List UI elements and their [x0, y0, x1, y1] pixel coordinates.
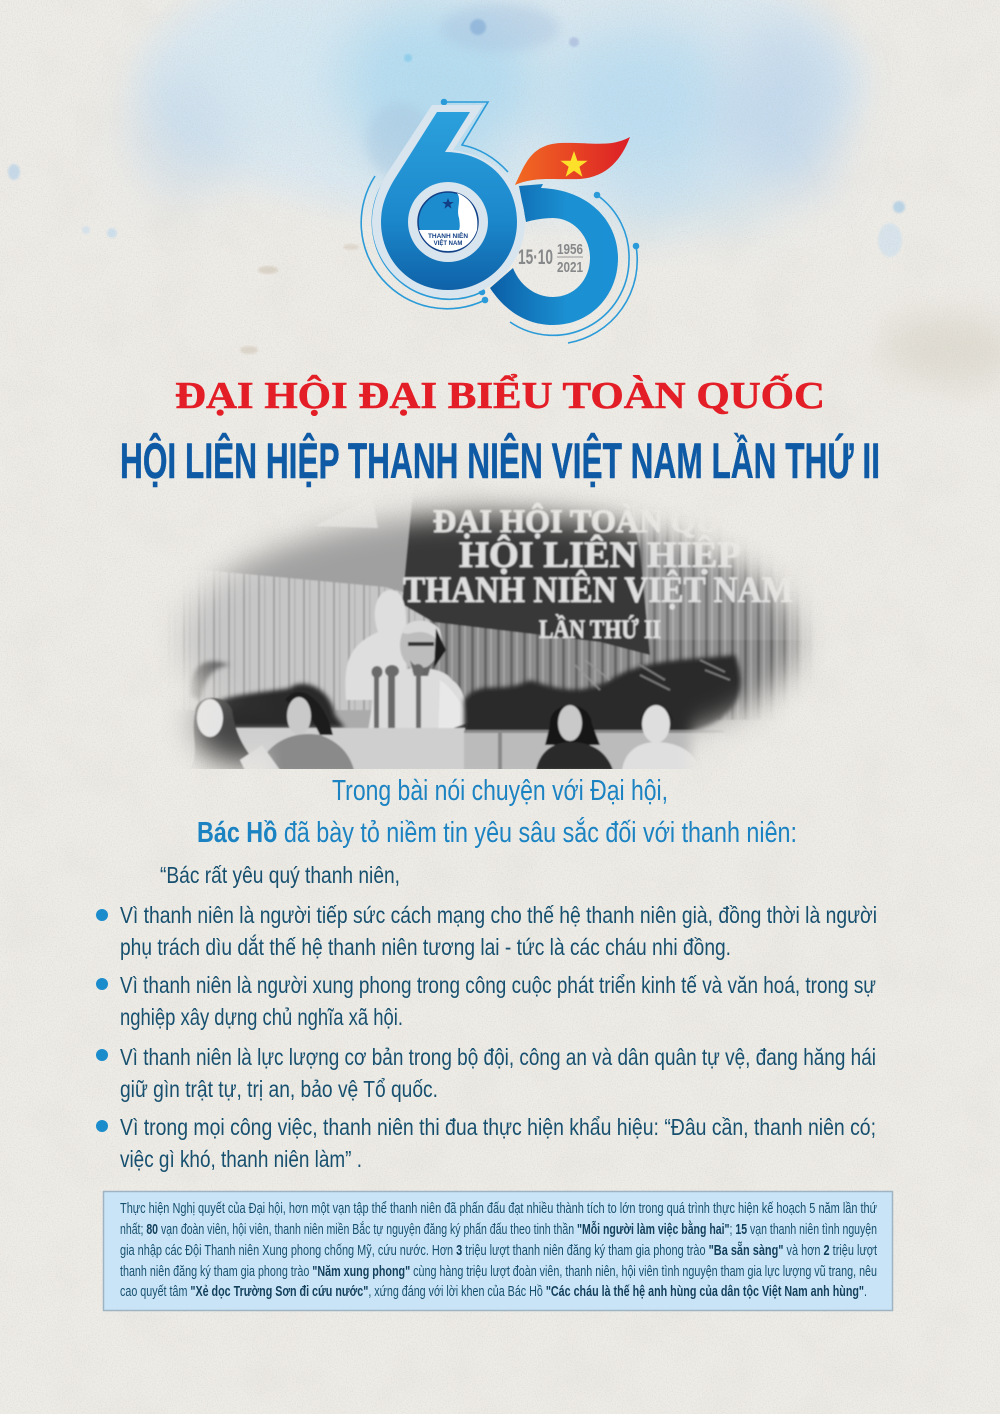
dark banner	[402, 480, 650, 655]
microphones	[370, 664, 424, 729]
seated women	[190, 692, 700, 770]
plants	[190, 655, 741, 735]
right curtain	[430, 516, 812, 720]
info box: nhất; 80 vạn đoàn viên, hội viên, thanh niên miền Bắc tự nguyện đăng ký phấn đấu theo tinh thần "Mỗi người làm việc bằng hai"; 15 vạn thanh niên tình nguyện	[120, 1220, 877, 1238]
banner lettering	[403, 502, 793, 644]
decorative thin arcs of the logo	[361, 100, 638, 343]
youth union emblem	[418, 192, 478, 252]
podium	[225, 728, 465, 770]
anniversary date: 1956	[557, 241, 583, 258]
info box: gia nhập các Đội Thanh niên Xung phong chống Mỹ, cứu nước. Hơn 3 triệu lượt thanh niên đăng ký tham gia phong trào "Ba sẵn sàng" và hơn 2 triệu lượt	[120, 1241, 877, 1259]
speaker	[368, 668, 466, 728]
quote opening: “Bác rất yêu quý thanh niên,	[160, 862, 400, 888]
bullet 3	[96, 1044, 876, 1102]
historic photo: Bác Hồ speaking at the congress	[168, 491, 814, 769]
flag star	[560, 151, 588, 177]
anniversary date: 2021	[557, 259, 583, 276]
anniversary date	[518, 241, 583, 276]
info box	[104, 1192, 892, 1310]
bullet 2	[96, 972, 876, 1030]
banner lettering: LẦN THỨ II	[539, 614, 661, 644]
left curtain	[177, 572, 430, 710]
bullet 1	[96, 902, 877, 960]
banner lettering: HỘI LIÊN HIỆP	[459, 534, 741, 576]
logo: 65 years	[361, 100, 638, 343]
youth union emblem: VIỆT NAM	[434, 239, 462, 247]
white bust	[345, 590, 408, 700]
youth union emblem: THANH NIÊN	[428, 231, 468, 240]
bullet 3: giữ gìn trật tự, trị an, bảo vệ Tổ quốc.	[120, 1076, 438, 1102]
intro heading: Trong bài nói chuyện với Đại hội,	[332, 775, 668, 807]
bullet 1: phụ trách dìu dắt thế hệ thanh niên tương lai - tức là các cháu nhi đồng.	[120, 934, 731, 960]
banner lettering: THANH NIÊN VIỆT NAM	[403, 569, 793, 611]
grey wedge above curtain	[248, 528, 408, 591]
intro heading	[197, 775, 797, 849]
bullet 4: việc gì khó, thanh niên làm” .	[120, 1146, 362, 1172]
number 6	[372, 105, 525, 298]
bullet 4: Vì trong mọi công việc, thanh niên thi đua thực hiện khẩu hiệu: “Đâu cần, thanh niên có;	[120, 1114, 876, 1140]
bullet 1: Vì thanh niên là người tiếp sức cách mạng cho thế hệ thanh niên già, đồng thời là người	[120, 902, 877, 928]
info box: cao quyết tâm "Xẻ dọc Trường Sơn đi cứu nước", xứng đáng với lời khen của Bác Hồ "Các cháu là thế hệ anh hùng của dân tộc Việt Nam anh hùng".	[120, 1284, 867, 1300]
flag	[515, 137, 630, 185]
number 5	[490, 184, 618, 325]
bullet 4	[96, 1114, 876, 1172]
bullet 2: nghiệp xây dựng chủ nghĩa xã hội.	[120, 1004, 403, 1030]
anniversary date: 15·10	[518, 246, 553, 269]
intro heading: Bác Hồ đã bày tỏ niềm tin yêu sâu sắc đối với thanh niên:	[197, 816, 797, 849]
banner lettering: ĐẠI HỘI TOÀN QUỐC	[433, 502, 767, 540]
title: red line: ĐẠI HỘI ĐẠI BIỂU TOÀN QUỐC	[175, 373, 825, 417]
